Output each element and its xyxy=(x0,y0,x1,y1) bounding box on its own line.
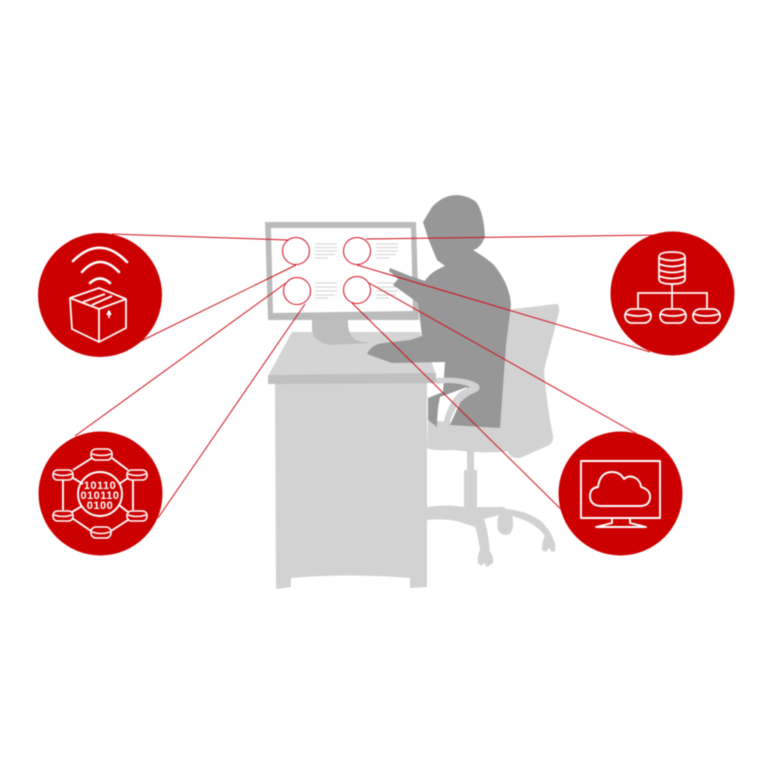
chair base and casters xyxy=(427,506,555,567)
wifi arcs xyxy=(73,248,127,283)
network cylinders xyxy=(53,449,147,538)
icon: data network xyxy=(38,432,162,556)
monitor xyxy=(265,222,419,345)
chair armrest xyxy=(436,378,480,426)
chair seat xyxy=(427,420,510,452)
database stack xyxy=(659,252,685,284)
chair xyxy=(427,304,559,567)
tree connectors xyxy=(638,284,707,308)
icon: database hierarchy xyxy=(610,232,734,356)
badge circle xyxy=(38,233,162,357)
small databases xyxy=(625,309,651,323)
monitor frame xyxy=(265,222,419,320)
hotspot: bottom right xyxy=(344,276,370,304)
badge circle xyxy=(610,232,734,356)
binary text: 010110 xyxy=(80,490,120,502)
monitor foot xyxy=(596,518,646,527)
chair post xyxy=(464,450,477,508)
binary text: 10110 xyxy=(84,480,116,492)
binary disc xyxy=(78,472,122,516)
badge circle xyxy=(38,432,162,556)
desk front edge xyxy=(268,373,436,384)
monitor screen xyxy=(271,228,413,313)
badge circle xyxy=(558,432,682,556)
binary text xyxy=(80,480,120,512)
icon: wireless package xyxy=(38,233,162,357)
hotspot: top right xyxy=(344,238,370,264)
desk body xyxy=(275,383,427,589)
hotspot: top left xyxy=(282,238,310,264)
screen text lines xyxy=(315,244,398,298)
desk xyxy=(268,332,436,589)
monitor outline xyxy=(581,461,660,518)
icon: cloud monitor xyxy=(558,432,682,556)
connector lines xyxy=(75,234,660,528)
binary text: 0100 xyxy=(87,500,113,512)
package box xyxy=(70,288,126,342)
hotspot: bottom left xyxy=(284,278,310,304)
monitor stand xyxy=(312,318,372,345)
network links xyxy=(63,458,133,531)
desk top surface xyxy=(268,332,436,376)
chair back xyxy=(490,304,559,458)
cloud xyxy=(590,472,650,506)
seated person silhouette xyxy=(367,195,511,428)
